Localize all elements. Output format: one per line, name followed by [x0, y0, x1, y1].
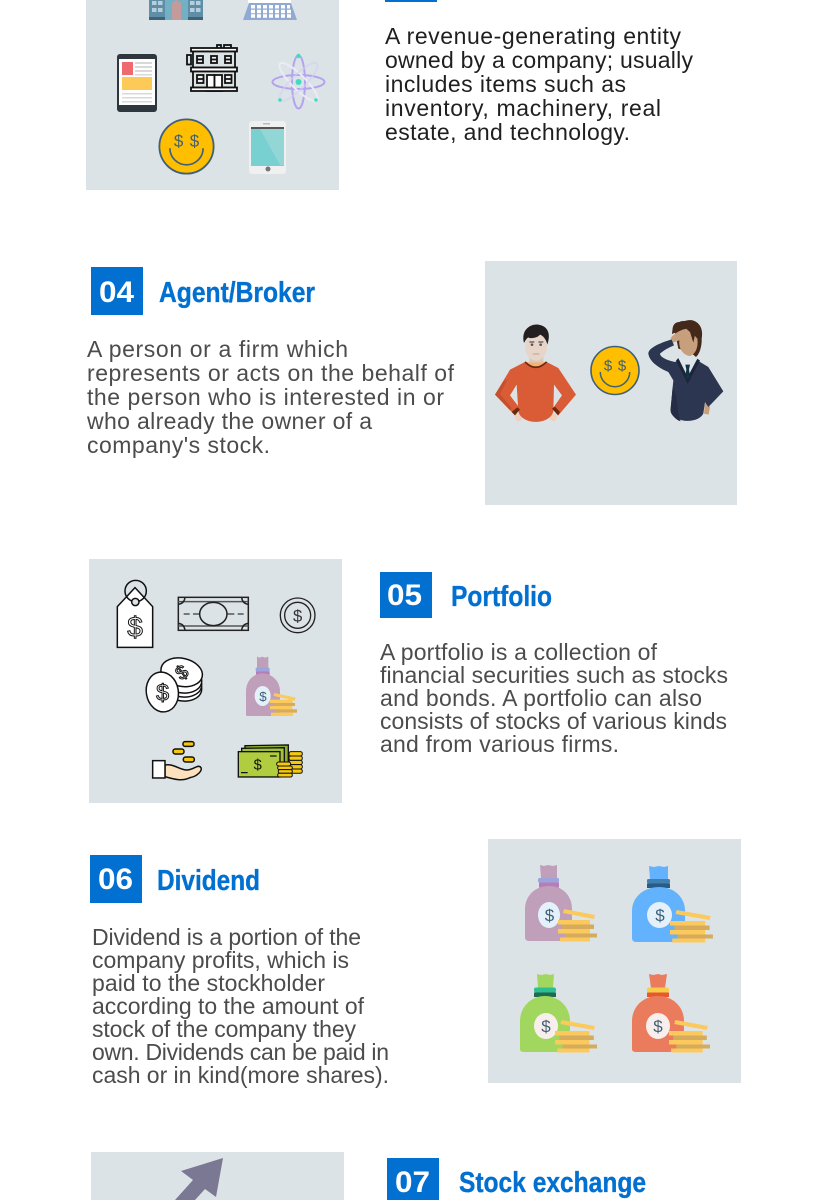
section 04 heading: 04	[99, 276, 134, 309]
text block: dividend definition: paid to the stockholder	[92, 970, 325, 996]
icon: coin stack: $	[172, 661, 193, 685]
icon: coin stack	[143, 654, 205, 714]
text block: portfolio definition	[380, 639, 728, 757]
icon: price tag: $	[127, 612, 143, 643]
text block: asset definition: A revenue-generating entity	[385, 23, 682, 49]
text block: dividend definition: stock of the company they	[92, 1016, 356, 1042]
text block: asset definition: estate, and technology.	[385, 119, 630, 145]
section 06 heading	[90, 855, 260, 903]
text block: agent definition: who already the owner of a	[86, 408, 372, 434]
text block: asset definition: includes items such as	[385, 71, 626, 97]
icon: atom	[272, 54, 324, 108]
icon: dollar smiley	[159, 119, 214, 174]
section 04 heading	[91, 267, 315, 315]
text block: agent definition: represents or acts on the behalf of	[87, 360, 455, 386]
text block: asset definition	[385, 23, 694, 145]
icon: money bag: $	[259, 689, 267, 704]
icon: coin stack: $	[156, 679, 169, 705]
text block: agent definition	[86, 336, 455, 458]
text block: asset definition: owned by a company; usually	[385, 47, 694, 73]
icon: cash with coins	[238, 745, 302, 777]
panel: stock exchange illustration	[91, 1152, 344, 1200]
text block: dividend definition: own. Dividends can be paid in	[92, 1039, 389, 1065]
section 05 heading: Portfolio	[451, 581, 552, 613]
section 04 heading: Agent/Broker	[159, 277, 315, 309]
section 07 heading: Stock exchange	[459, 1167, 646, 1199]
text block: portfolio definition: and from various firms.	[380, 731, 619, 757]
icon: blue money bag	[632, 866, 713, 942]
text block: dividend definition: according to the amount of	[92, 993, 365, 1019]
section 07 heading: 07	[395, 1166, 430, 1199]
icon: purple money bag: $	[545, 906, 555, 925]
icon: tablet with news	[117, 54, 157, 112]
icon: purple money bag	[525, 865, 597, 942]
icon: price tag	[117, 580, 153, 647]
text block: dividend definition: cash or in kind(more shares).	[92, 1062, 389, 1088]
text block: dividend definition: company profits, which is	[92, 947, 349, 973]
number badge top fragment	[385, 0, 437, 2]
panel: agent illustration	[485, 261, 737, 505]
text block: portfolio definition: financial securities such as stocks	[380, 662, 728, 688]
icon: office building	[149, 0, 203, 20]
section 05 heading: 05	[387, 579, 422, 612]
icon: orange money bag: $	[653, 1017, 663, 1036]
icon: coin: $	[293, 606, 302, 625]
icon: orange money bag	[632, 974, 710, 1052]
icon: smartphone	[249, 121, 286, 174]
icon: green money bag: $	[541, 1017, 551, 1036]
icon: rising arrow	[175, 1158, 223, 1200]
text block: portfolio definition: and bonds. A portfolio can also	[380, 685, 702, 711]
icon: dollar smiley	[591, 346, 639, 394]
panel: asset illustration	[86, 0, 339, 190]
panel: dividend illustration	[488, 839, 741, 1083]
section 07 heading	[387, 1158, 646, 1200]
icon: keyboard	[243, 0, 297, 20]
icon: cash with coins: $	[254, 758, 262, 774]
text block: portfolio definition: A portfolio is a collection of	[380, 639, 658, 665]
text block: agent definition: company's stock.	[87, 432, 270, 458]
text block: dividend definition: Dividend is a portion of the	[92, 924, 361, 950]
text block: portfolio definition: consists of stocks of various kinds	[380, 708, 727, 734]
icon: hand with coins	[153, 742, 201, 780]
text block: agent definition: A person or a firm which	[87, 336, 348, 362]
icon: green money bag	[520, 974, 597, 1052]
section 06 heading: 06	[98, 863, 133, 896]
panel: portfolio illustration	[89, 559, 342, 803]
icon: man in orange sweater	[495, 325, 576, 422]
icon: shop building	[187, 45, 237, 91]
icon: banknote	[178, 597, 248, 630]
icon: money bag	[246, 657, 297, 716]
text block: agent definition: the person who is interested in or	[87, 384, 444, 410]
text block: asset definition: inventory, machinery, real	[385, 95, 661, 121]
section 06 heading: Dividend	[157, 865, 260, 897]
icon: woman in navy suit	[648, 320, 723, 421]
text block: dividend definition	[92, 924, 389, 1088]
icon: blue money bag: $	[655, 906, 665, 925]
section 05 heading	[380, 572, 552, 618]
icon: coin	[280, 598, 315, 633]
